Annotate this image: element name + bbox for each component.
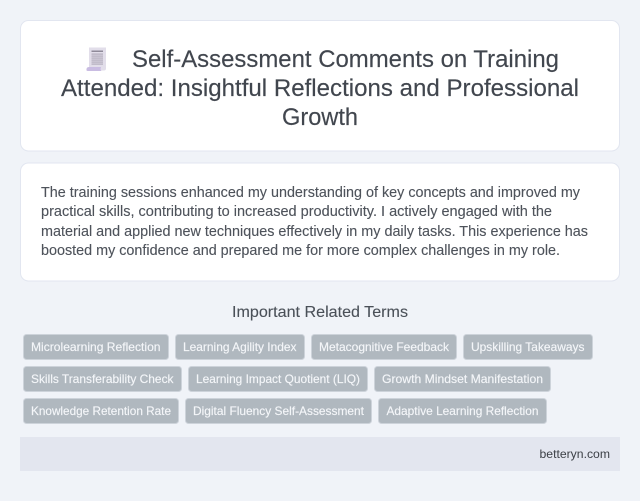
- panel: summary card: [20, 163, 620, 281]
- tag: Knowledge Retention Rate: [24, 398, 178, 424]
- tag: Microlearning Reflection: [24, 334, 168, 360]
- tag: Skills Transferability Check: Skills Transferability Check: [31, 372, 174, 386]
- panel: title card: [20, 20, 620, 151]
- tag: Adaptive Learning Reflection: [378, 398, 546, 424]
- panel: related terms tags: [24, 334, 592, 424]
- footer source text: betteryn.com: [540, 447, 610, 461]
- tag: Learning Agility Index: [176, 334, 304, 360]
- tag: Metacognitive Feedback: [312, 334, 456, 360]
- tag: Digital Fluency Self-Assessment: Digital Fluency Self-Assessment: [193, 404, 365, 418]
- icon: document scroll: [86, 48, 106, 71]
- summary text: material and applied new techniques effectively in my daily tasks. This experience has: [41, 224, 588, 240]
- tag: Digital Fluency Self-Assessment: [186, 398, 372, 424]
- title: Attended: Insightful Reflections and Professional: [61, 75, 579, 102]
- tag: Learning Impact Quotient (LIQ): [188, 366, 368, 392]
- tag: Adaptive Learning Reflection: Adaptive Learning Reflection: [386, 404, 538, 418]
- tag: Metacognitive Feedback: Metacognitive Feedback: [319, 340, 450, 354]
- summary text: [41, 185, 588, 259]
- title: [61, 46, 579, 131]
- tag: Learning Agility Index: Learning Agility Index: [183, 340, 296, 354]
- tag: Growth Mindset Manifestation: [374, 366, 550, 392]
- tag: Growth Mindset Manifestation: Growth Mindset Manifestation: [382, 372, 543, 386]
- summary text: The training sessions enhanced my understanding of key concepts and improved my: [41, 185, 581, 201]
- footer bar: [20, 437, 620, 471]
- summary text: boosted my confidence and prepared me for more complex challenges in my role.: [41, 243, 560, 259]
- title: Growth: [282, 104, 358, 131]
- tag: Knowledge Retention Rate: Knowledge Retention Rate: [31, 404, 171, 418]
- summary text: practical skills, contributing to increased productivity. I actively engaged with the: [41, 204, 552, 220]
- heading: important related terms: Important Related Terms: [232, 304, 408, 321]
- tag: Microlearning Reflection: Microlearning Reflection: [31, 340, 160, 354]
- tag: Upskilling Takeaways: [464, 334, 592, 360]
- tag: Skills Transferability Check: [24, 366, 182, 392]
- title: Self-Assessment Comments on Training: [132, 46, 559, 73]
- tag: Learning Impact Quotient (LIQ): Learning Impact Quotient (LIQ): [196, 372, 360, 386]
- tag: Upskilling Takeaways: Upskilling Takeaways: [471, 340, 584, 354]
